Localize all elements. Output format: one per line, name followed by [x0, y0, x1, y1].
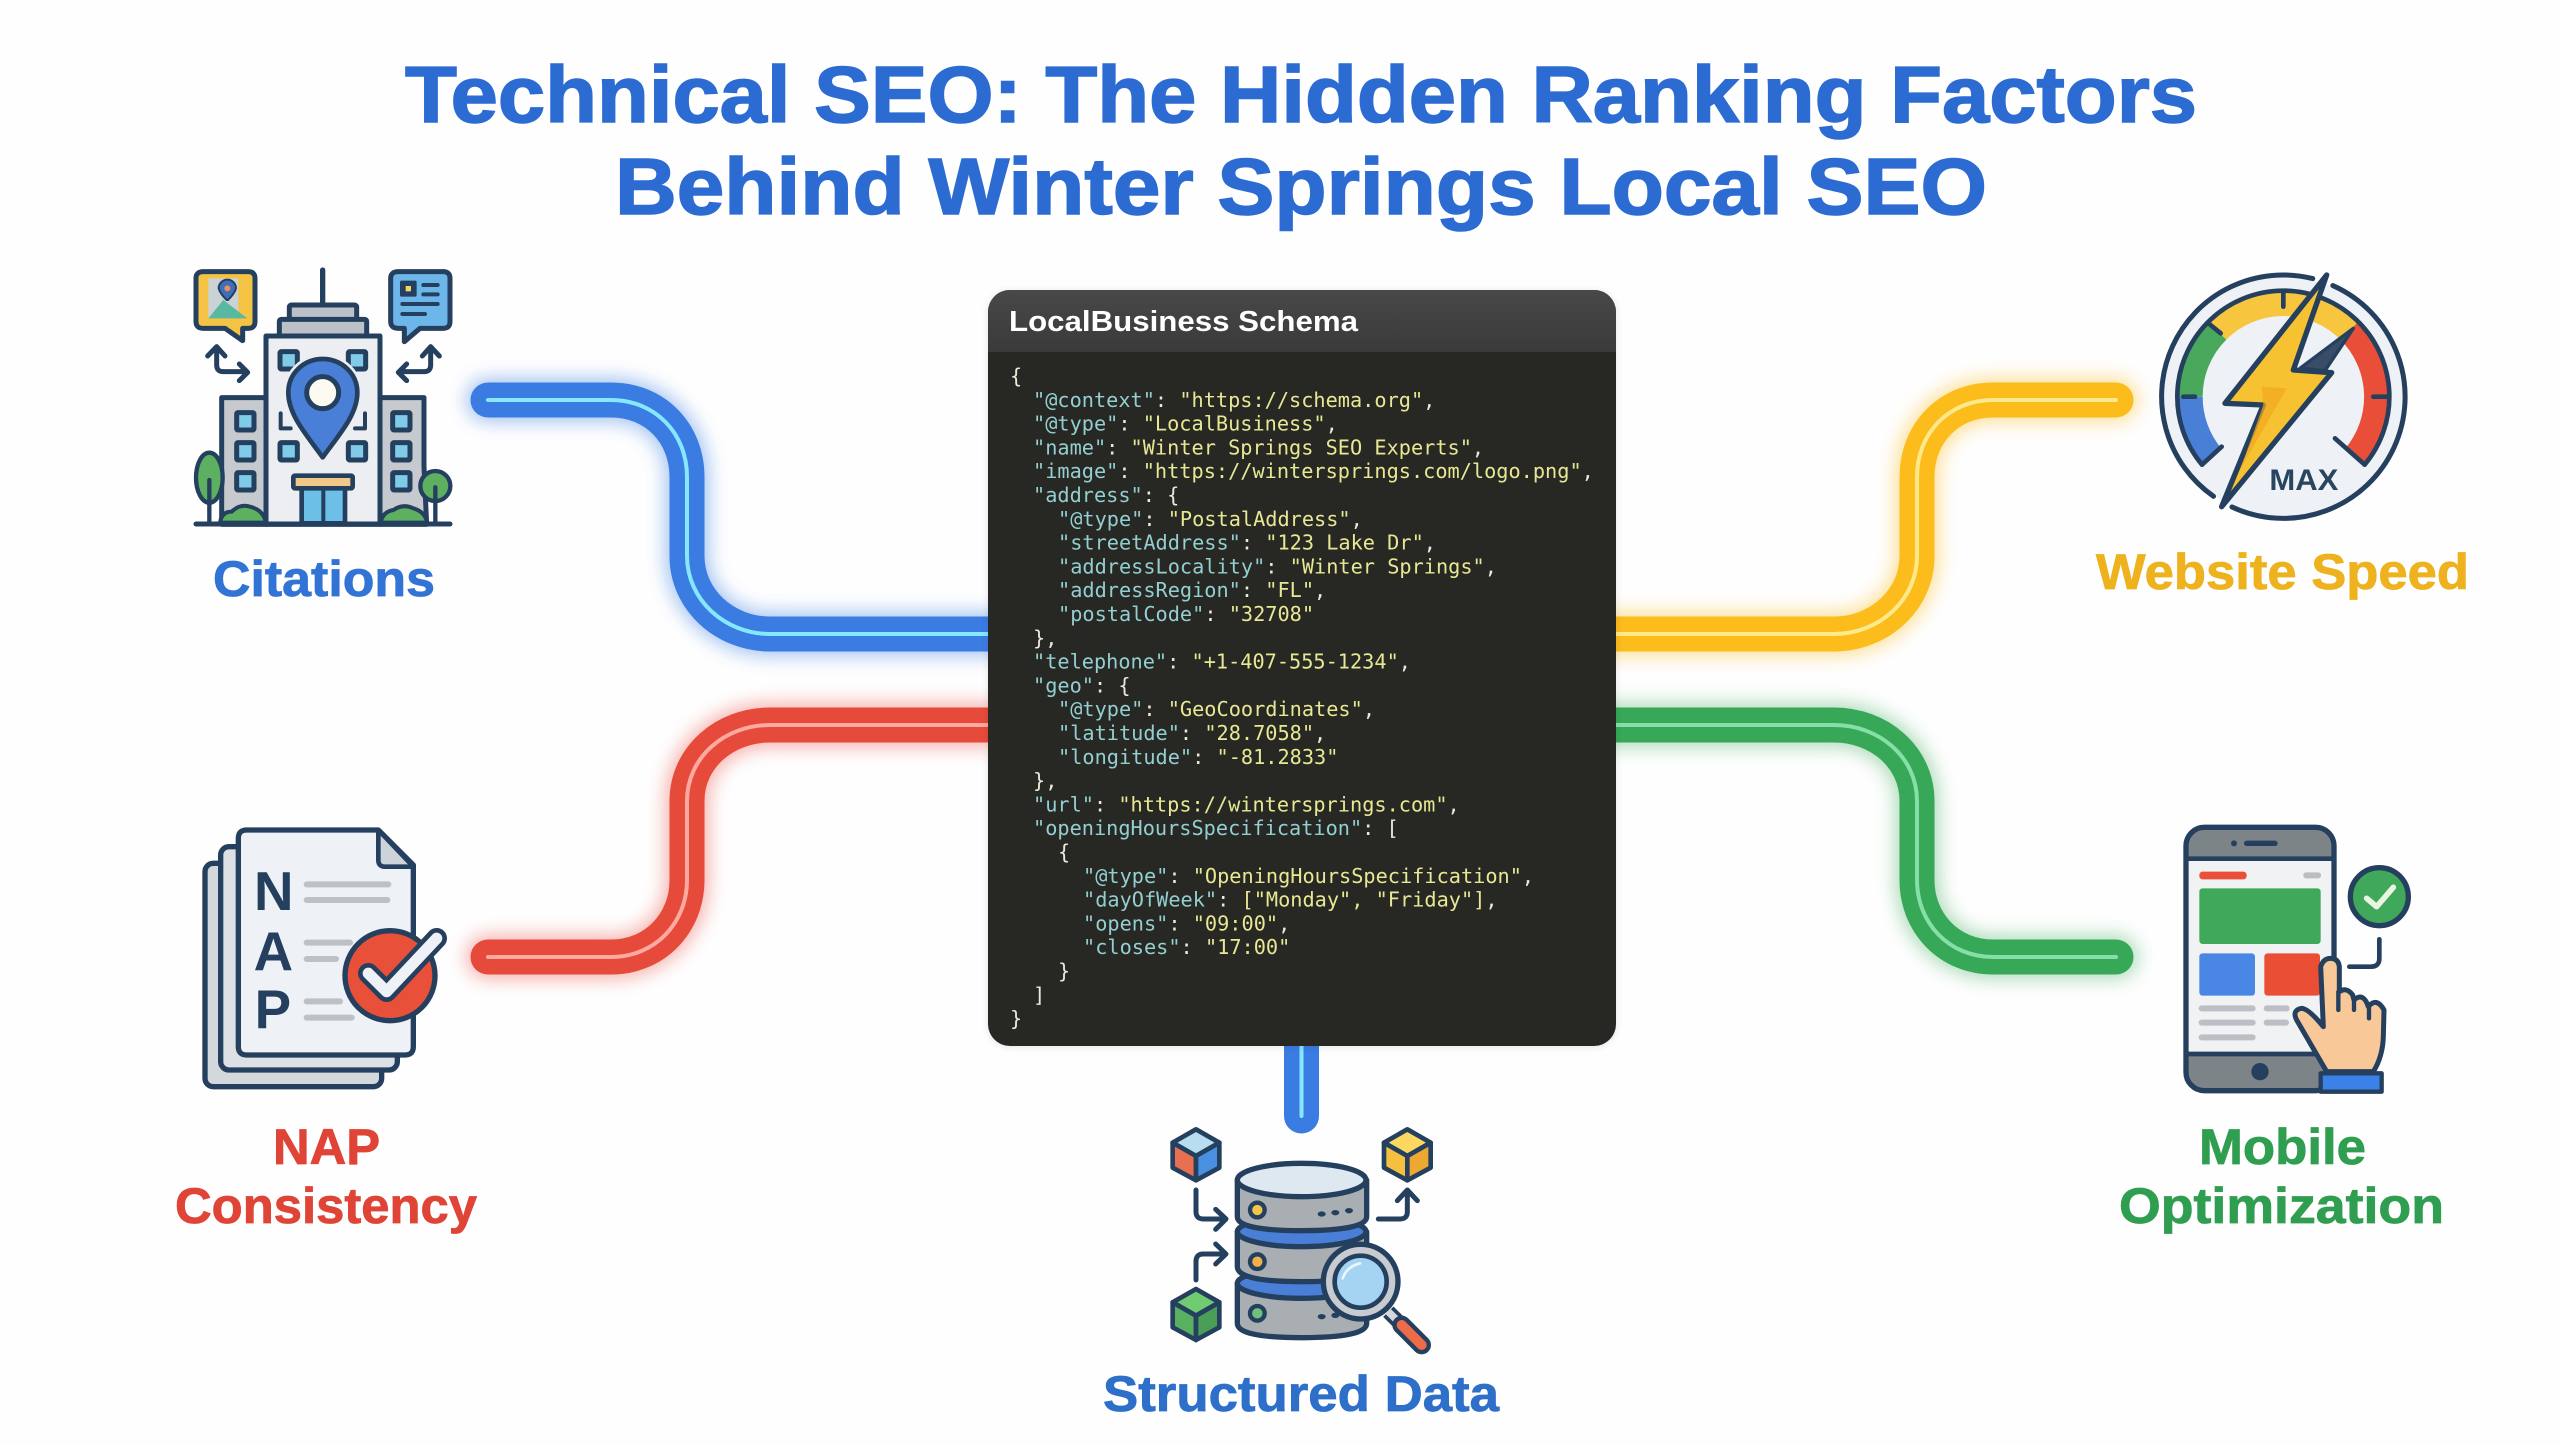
- connector: blue to structured data: [1280, 1040, 1324, 1116]
- code listing: "telephone": "+1-407-555-1234",: [1033, 650, 1411, 674]
- title: [405, 50, 2197, 231]
- icon: structured data database with cubes and magnifier: [1173, 1129, 1431, 1345]
- connector: green to mobile optimization: [1604, 725, 2116, 957]
- code listing: },: [1033, 626, 1057, 650]
- code listing: "address": {: [1033, 483, 1179, 507]
- connector: blue to citations: [488, 400, 1000, 634]
- code listing: "streetAddress": "123 Lake Dr",: [1058, 531, 1436, 555]
- code listing: "@type": "GeoCoordinates",: [1058, 697, 1375, 721]
- code listing: }: [1010, 1007, 1022, 1031]
- panel header: LocalBusiness Schema: [1009, 306, 1359, 338]
- heading: mobile optimization: [2119, 1119, 2444, 1234]
- code listing: "closes": "17:00": [1083, 935, 1290, 959]
- icon: NAP document with check mark: N: [254, 861, 293, 922]
- icon: website speed gauge with lightning bolt: MAX: [2269, 464, 2338, 497]
- code listing: {: [1058, 840, 1070, 864]
- code listing: "@type": "LocalBusiness",: [1033, 412, 1338, 436]
- code listing: "@type": "OpeningHoursSpecification",: [1083, 864, 1534, 888]
- code listing: "postalCode": "32708": [1058, 602, 1314, 626]
- code listing: "@type": "PostalAddress",: [1058, 507, 1363, 531]
- heading: website speed: Website Speed: [2096, 544, 2469, 600]
- code listing: }: [1058, 959, 1070, 983]
- code listing: {: [1010, 364, 1022, 388]
- heading: NAP consistency: Consistency: [175, 1178, 477, 1234]
- icon: website speed gauge with lightning bolt: [2162, 275, 2405, 518]
- title: Behind Winter Springs Local SEO: [615, 142, 1987, 231]
- panel: LocalBusiness schema code: [988, 290, 1616, 1047]
- heading: structured data: Structured Data: [1103, 1366, 1500, 1422]
- code listing: },: [1033, 769, 1057, 793]
- code listing: [1010, 364, 1594, 1031]
- code listing: "@context": "https://schema.org",: [1033, 388, 1435, 412]
- icon: mobile phone with tapping hand: [2186, 827, 2408, 1092]
- connector: yellow to website speed: [1604, 400, 2116, 634]
- code listing: ]: [1033, 983, 1045, 1007]
- icon: NAP document with check mark: A: [254, 921, 293, 982]
- icon: NAP document with check mark: [205, 830, 437, 1087]
- code listing: "name": "Winter Springs SEO Experts",: [1033, 435, 1484, 459]
- icon: citations building with map pin: [196, 270, 450, 524]
- code listing: "addressLocality": "Winter Springs",: [1058, 554, 1497, 578]
- heading: NAP consistency: NAP: [273, 1119, 380, 1175]
- code listing: "longitude": "-81.2833": [1058, 745, 1338, 769]
- heading: citations: Citations: [213, 551, 435, 607]
- code listing: "opens": "09:00",: [1083, 911, 1290, 935]
- title: Technical SEO: The Hidden Ranking Factors: [405, 50, 2197, 139]
- code listing: "latitude": "28.7058",: [1058, 721, 1326, 745]
- heading: mobile optimization: Mobile: [2199, 1119, 2366, 1175]
- icon: NAP document with check mark: P: [255, 979, 291, 1040]
- code listing: "geo": {: [1033, 673, 1131, 697]
- connector: red to NAP consistency: [488, 725, 1000, 957]
- heading: NAP consistency: [175, 1119, 477, 1234]
- panel header: [988, 290, 1616, 352]
- heading: mobile optimization: Optimization: [2119, 1178, 2444, 1234]
- code listing: "dayOfWeek": ["Monday", "Friday"],: [1083, 888, 1498, 912]
- code listing: "addressRegion": "FL",: [1058, 578, 1326, 602]
- code listing: "url": "https://wintersprings.com",: [1033, 792, 1460, 816]
- code listing: "openingHoursSpecification": [: [1033, 816, 1399, 840]
- code listing: "image": "https://wintersprings.com/logo.png",: [1033, 459, 1594, 483]
